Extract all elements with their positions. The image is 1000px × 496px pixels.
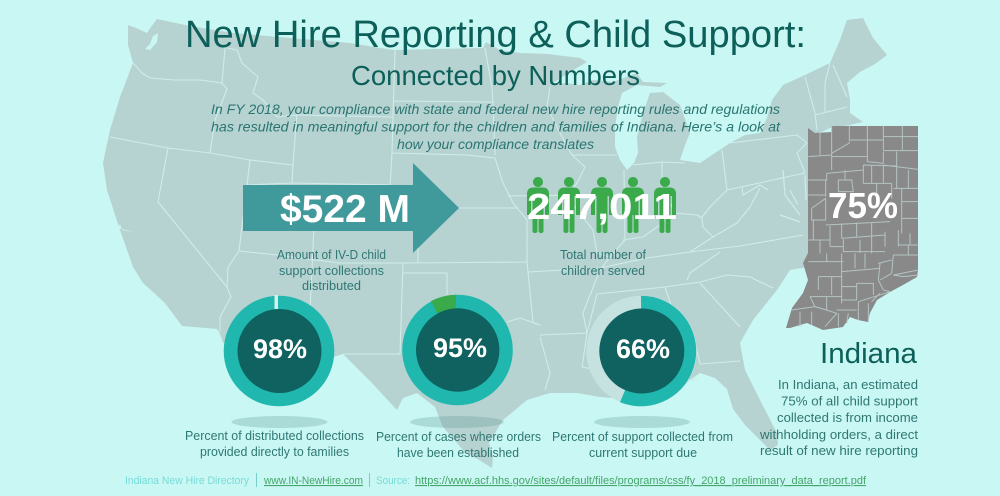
map: Indiana with counties: 75% — [828, 185, 898, 226]
donut: 98 percent: 98% — [253, 334, 307, 364]
text block: Indiana estimate: In Indiana, an estimated — [778, 377, 918, 392]
donut: 95 percent: 95% — [433, 333, 487, 363]
footer: directory and source: Source: — [376, 475, 410, 487]
text block: Indiana estimate: collected is from income — [777, 410, 918, 425]
label: collections: Amount of IV-D child — [277, 247, 386, 262]
label: collections — [277, 247, 386, 293]
donut: 98 percent — [224, 295, 334, 428]
caption: 95 percent: have been established — [397, 445, 519, 460]
icon: row of children with total: 247,011 — [527, 186, 677, 227]
donut: 95 percent — [402, 295, 513, 428]
label: children served: Total number of — [560, 247, 646, 262]
background map: United States — [103, 18, 887, 468]
caption: 98 percent — [185, 428, 364, 459]
intro paragraph: how your compliance translates — [397, 136, 594, 152]
caption: 98 percent: Percent of distributed collections — [185, 428, 364, 443]
intro paragraph — [211, 101, 781, 152]
heading: Indiana: Indiana — [820, 338, 918, 370]
text block: Indiana estimate: 75% of all child support — [781, 394, 918, 408]
caption: 66 percent: current support due — [589, 445, 697, 460]
caption: 66 percent — [552, 429, 733, 460]
footer: directory and source: www.IN-NewHire.com — [263, 475, 363, 487]
caption: 95 percent — [376, 429, 541, 460]
subtitle: Connected by Numbers — [351, 60, 640, 91]
label: collections: distributed — [302, 278, 361, 293]
donut: 66 percent — [586, 296, 697, 428]
caption: 66 percent: Percent of support collected from — [552, 429, 733, 444]
caption: 98 percent: provided directly to families — [200, 444, 349, 459]
intro paragraph: has resulted in meaningful support for the children and families of Indiana. Here’s a look at — [211, 118, 781, 134]
footer: directory and source: https://www.acf.hhs.gov/sites/default/files/programs/css/fy_2018_preliminary_data_report.pdf — [415, 475, 867, 487]
title: New Hire Reporting & Child Support: — [185, 14, 806, 56]
text block: Indiana estimate: result of new hire reporting — [760, 443, 918, 458]
arrow: collections amount — [243, 163, 459, 253]
text block: Indiana estimate: withholding orders, a direct — [759, 427, 918, 442]
arrow: collections amount: $522 M — [280, 188, 410, 231]
label: children served: children served — [561, 263, 645, 278]
footer: directory and source: Indiana New Hire Directory — [125, 475, 249, 487]
map: Indiana with counties — [786, 126, 918, 330]
label: collections: support collections — [279, 263, 384, 278]
label: children served — [560, 247, 646, 278]
caption: 95 percent: Percent of cases where orders — [376, 429, 541, 444]
icon: row of children with total — [527, 177, 677, 233]
footer: directory and source — [125, 473, 867, 487]
text block: Indiana estimate — [759, 377, 918, 458]
donut: 66 percent: 66% — [616, 334, 670, 364]
intro paragraph: In FY 2018, your compliance with state and federal new hire reporting rules and regulations — [211, 101, 780, 117]
